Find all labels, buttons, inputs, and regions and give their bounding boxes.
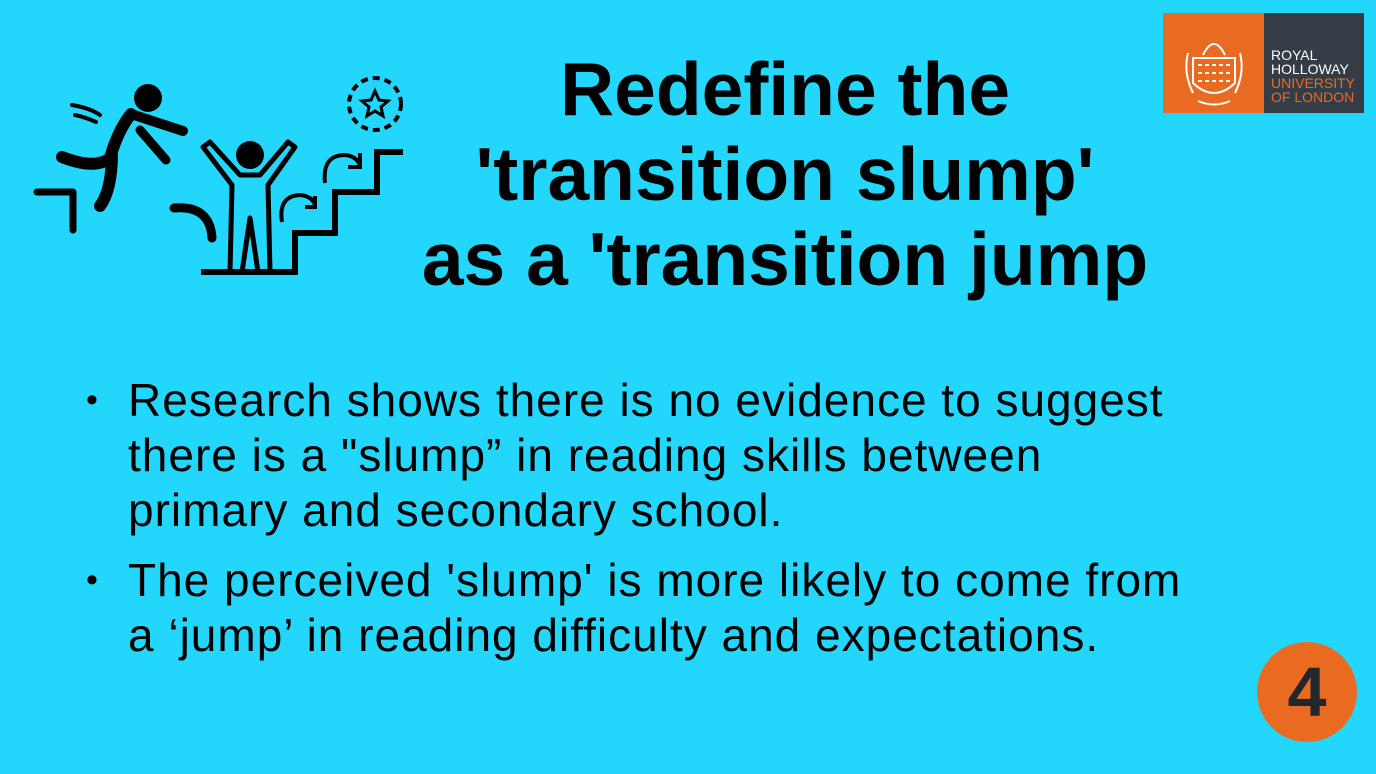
bullet 2: a ‘jump’ in reading difficulty and expectations. bbox=[128, 609, 1099, 661]
jumping figure bbox=[174, 141, 295, 272]
running falling figure bbox=[37, 84, 183, 230]
bullet 1: Research shows there is no evidence to suggest bbox=[128, 374, 1164, 426]
bullet 2 bbox=[128, 553, 1328, 663]
title bbox=[422, 47, 1148, 301]
logo: Royal Holloway: ROYAL bbox=[1271, 47, 1317, 63]
icon: figures climbing stairs bbox=[34, 76, 403, 275]
bullet text bbox=[87, 374, 1181, 661]
stairs with arrows and star bbox=[201, 78, 403, 272]
title: 'transition slump' bbox=[475, 132, 1095, 216]
bullet 2: The perceived 'slump' is more likely to come from bbox=[128, 554, 1181, 606]
title: as a 'transition jump bbox=[422, 217, 1148, 301]
bullet 1: primary and secondary school. bbox=[128, 484, 783, 536]
bullet 1: there is a "slump” in reading skills between bbox=[128, 429, 1042, 481]
logo: Royal Holloway bbox=[1163, 13, 1364, 113]
page number badge bbox=[1257, 642, 1357, 742]
title: Redefine the bbox=[560, 47, 1010, 131]
logo: Royal Holloway: HOLLOWAY bbox=[1271, 61, 1349, 77]
logo: Royal Holloway: UNIVERSITY bbox=[1271, 75, 1355, 91]
page number badge: 4 bbox=[1288, 653, 1326, 731]
bullet 1 bbox=[128, 373, 1328, 538]
logo: Royal Holloway: OF LONDON bbox=[1271, 89, 1354, 105]
